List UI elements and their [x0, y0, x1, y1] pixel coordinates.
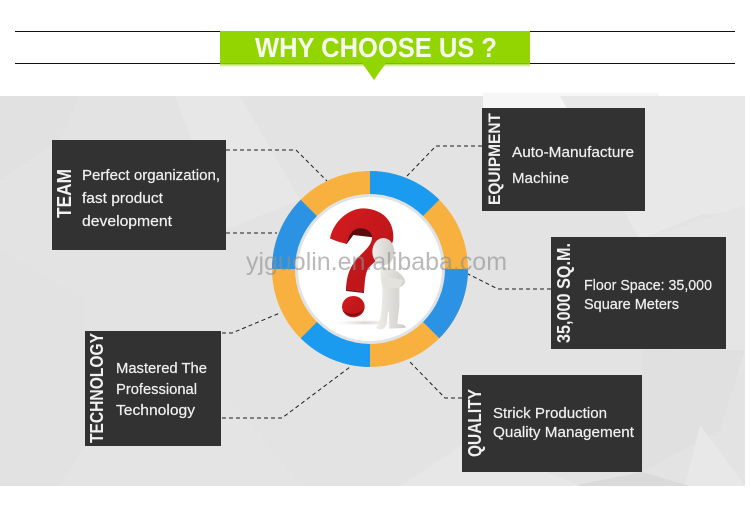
text: floor space description: Floor Space: 35,000: [584, 277, 712, 294]
text: equipment description: Machine: [512, 170, 569, 187]
connector: quality: [410, 362, 462, 398]
text: team description: development: [82, 213, 173, 230]
text: quality description: [493, 405, 635, 441]
text: team description: Perfect organization,: [82, 167, 220, 184]
donut ring: [272, 171, 468, 367]
panel: technology: [85, 331, 221, 446]
text: quality description: Strick Production: [493, 405, 607, 422]
title banner: [220, 31, 530, 80]
connector: team bottom: [226, 232, 277, 234]
top rule lines: [15, 32, 735, 64]
text: floor space description: Square Meters: [584, 296, 679, 313]
heading: quality: QUALITY: [465, 389, 485, 457]
icon: question mark with thinking figure: [328, 208, 406, 329]
text: team description: fast product: [82, 190, 164, 207]
ring segment: blue upper left: [272, 200, 370, 269]
text: technology description: [116, 360, 207, 419]
text: equipment description: [512, 144, 634, 187]
connector: technology top: [222, 313, 280, 333]
heading: floor space: 35,000 SQ.M.: [554, 243, 574, 343]
ring segment: blue lower right: [370, 269, 468, 338]
panel: equipment: [482, 108, 645, 211]
heading: equipment: EQUIPMENT: [485, 112, 504, 205]
text: technology description: Technology: [116, 402, 196, 419]
heading: technology: TECHNOLOGY: [87, 333, 107, 443]
text: team description: [82, 167, 220, 230]
panel: grey low-poly background: [0, 93, 745, 486]
connector: team top: [226, 150, 327, 181]
connector: floor space: [468, 274, 551, 289]
panel: quality: [462, 375, 642, 472]
panel: team: [52, 140, 226, 250]
watermark: yjguolin.en.alibaba.com: [246, 248, 507, 276]
heading: team: TEAM: [54, 169, 76, 218]
connector: equipment: [407, 146, 482, 176]
text: equipment description: Auto-Manufacture: [512, 144, 634, 161]
ring segment: blue top right: [370, 171, 439, 269]
ring segment: blue bottom left: [301, 269, 370, 367]
title: WHY CHOOSE US ?: [255, 32, 497, 63]
text: technology description: Professional: [116, 381, 197, 398]
connector: technology bottom: [222, 367, 350, 418]
text: technology description: Mastered The: [116, 360, 207, 377]
text: quality description: Quality Management: [493, 424, 635, 441]
text: floor space description: [584, 277, 712, 313]
panel: floor space: [551, 237, 726, 349]
